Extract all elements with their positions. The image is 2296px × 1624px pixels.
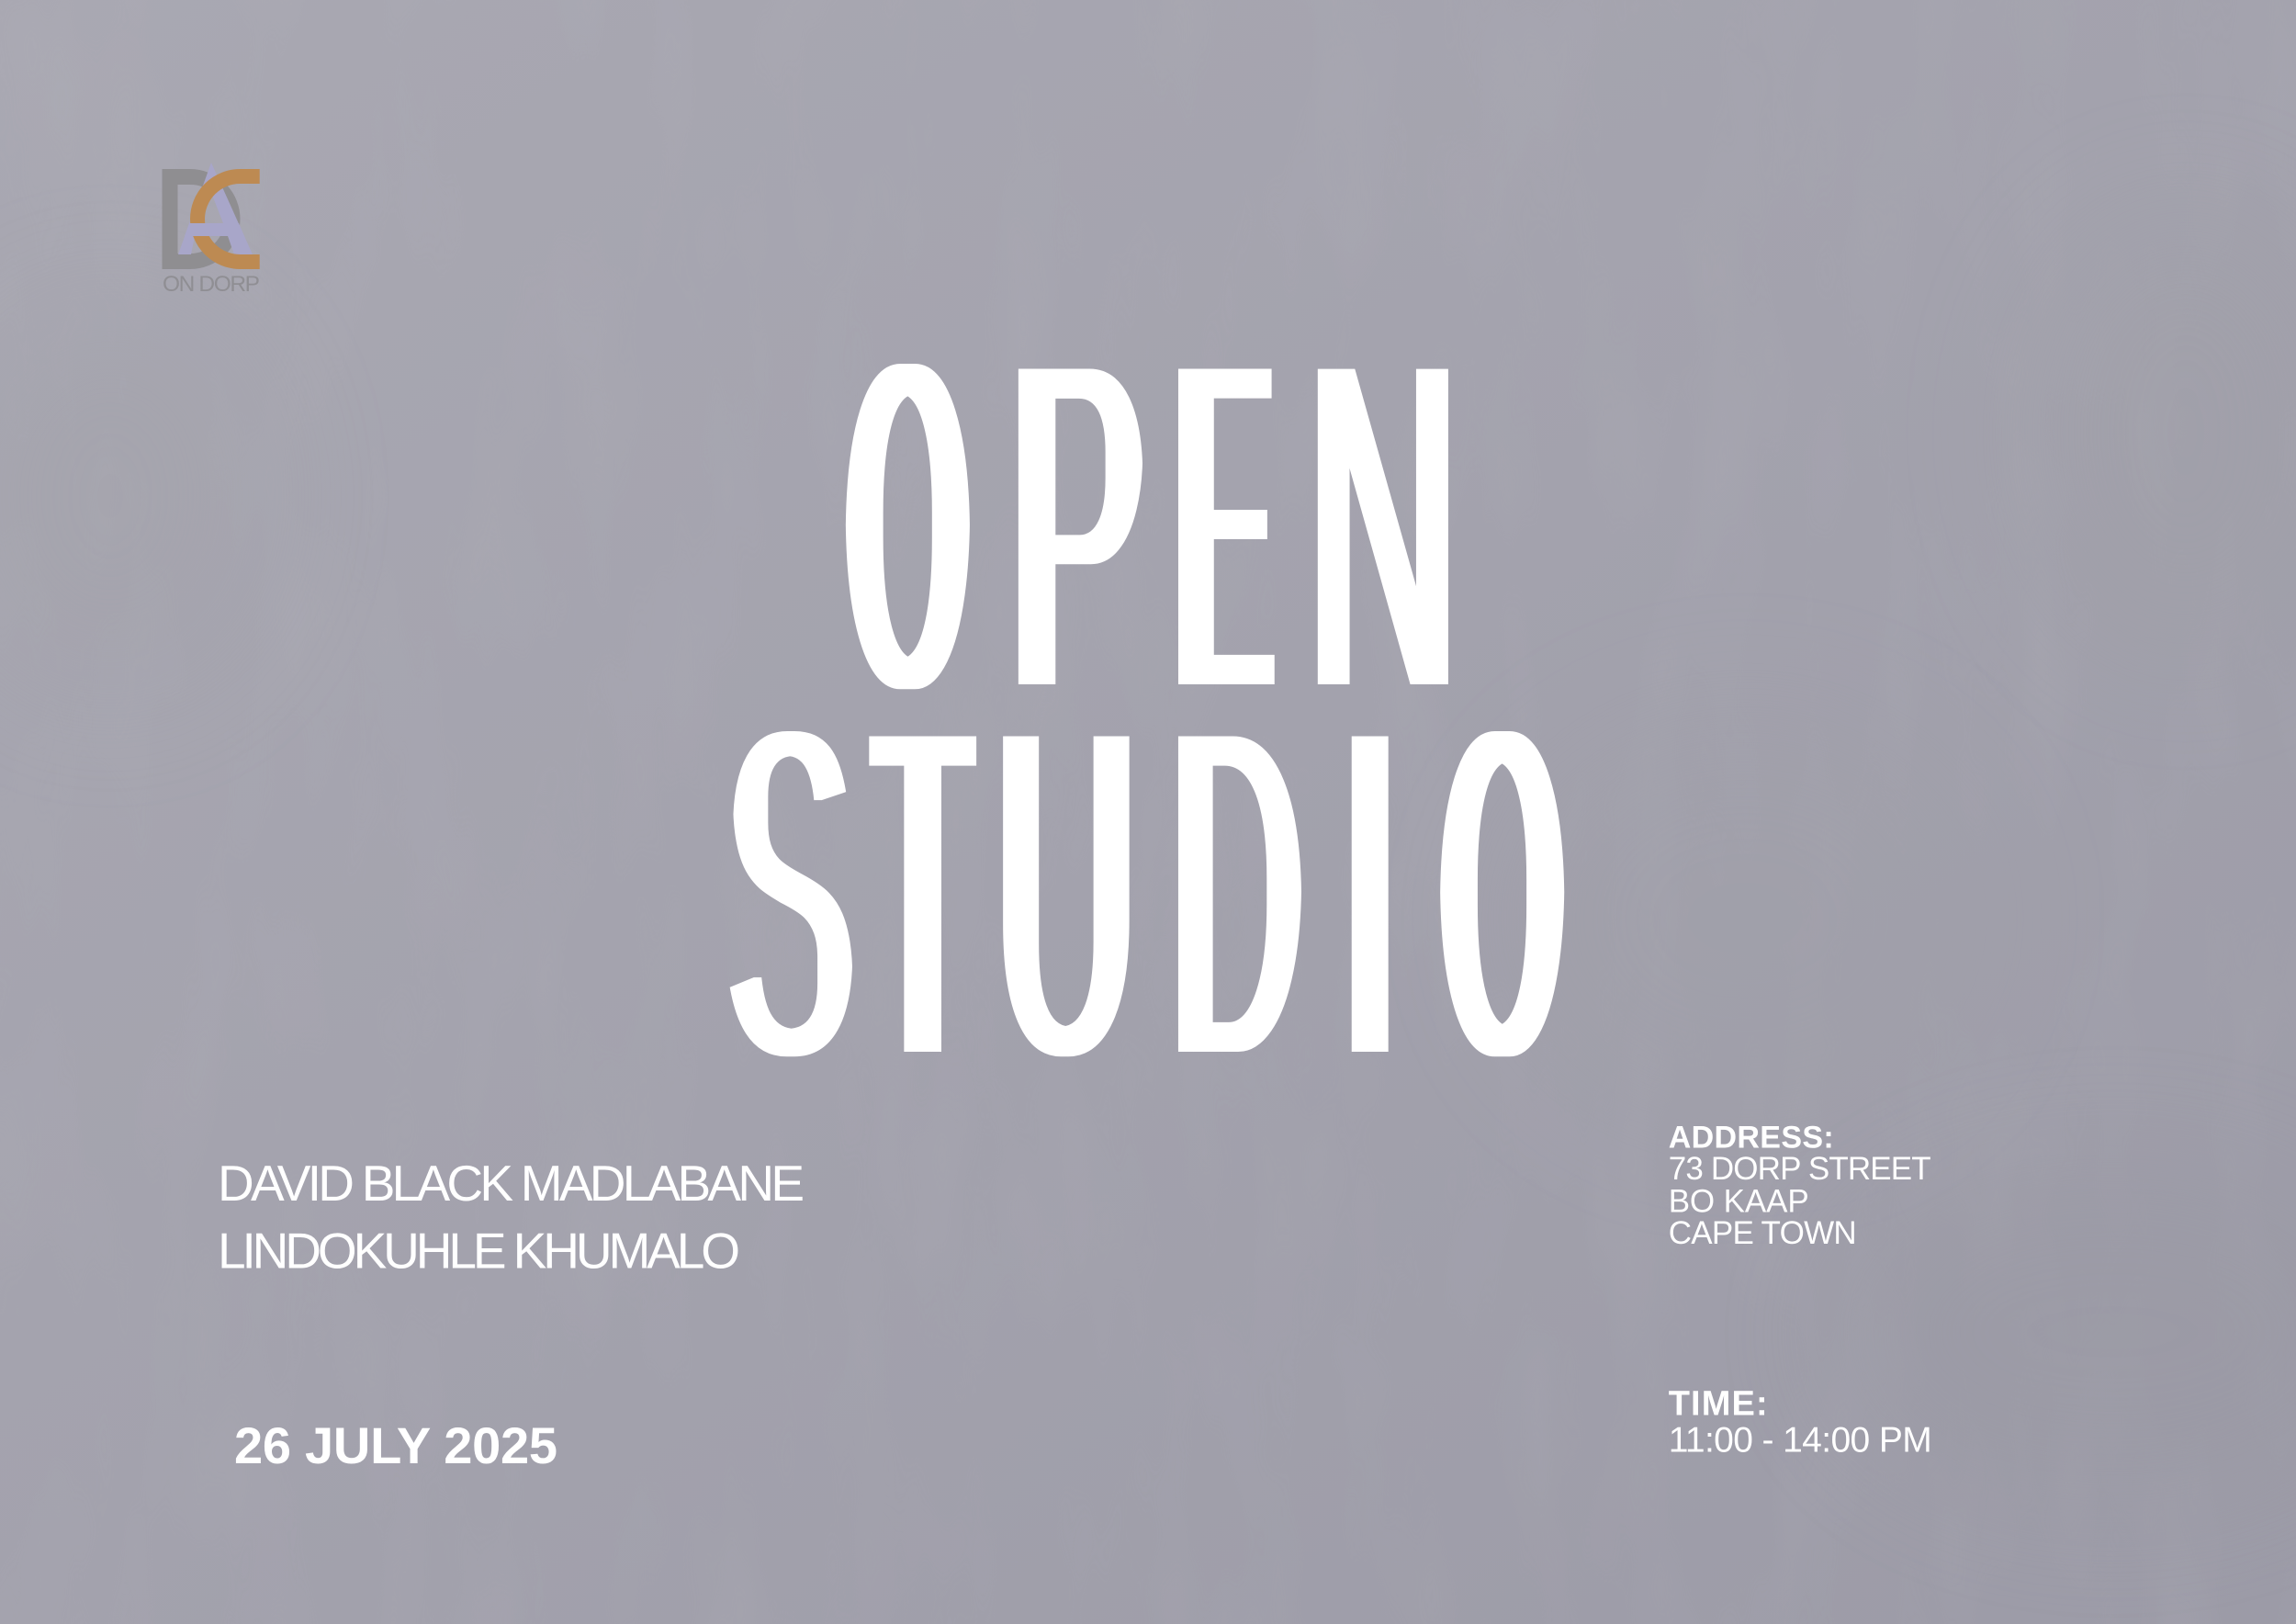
title: OPEN STUDIO: D — [1169, 615, 1306, 1170]
title: OPEN STUDIO: U — [995, 617, 1138, 1171]
logo letter D — [170, 176, 232, 261]
logo A crossbar over C — [185, 223, 244, 236]
artist names: LINDOKUHLE KHUMALO — [218, 1223, 740, 1280]
title: OPEN STUDIO — [725, 248, 1564, 1171]
time block — [1669, 1385, 1932, 1460]
artist names — [218, 1155, 805, 1280]
title: OPEN STUDIO: E — [1176, 250, 1273, 803]
address block: BO KAAP — [1669, 1183, 1809, 1219]
title: OPEN STUDIO: I — [1349, 615, 1391, 1170]
date: 26 JULY 2025 — [234, 1416, 557, 1474]
logo: DA C on Dorp — [163, 163, 260, 297]
title: OPEN STUDIO: O — [847, 248, 969, 803]
title: OPEN STUDIO: T — [874, 615, 971, 1170]
logo letter C — [197, 176, 260, 262]
title: OPEN STUDIO: P — [1008, 248, 1146, 803]
title: OPEN STUDIO: O — [1441, 615, 1564, 1170]
title: OPEN STUDIO: N — [1308, 266, 1458, 784]
artist names: DAVID BLACK MADLABANE — [218, 1155, 805, 1212]
address block: CAPE TOWN — [1669, 1215, 1857, 1251]
time block: TIME: — [1669, 1385, 1768, 1424]
logo letter A — [178, 163, 253, 254]
title: OPEN STUDIO: S — [725, 617, 857, 1171]
address block — [1669, 1120, 1931, 1251]
address block: 73 DORP STREET — [1669, 1151, 1931, 1187]
time block: 11:00 - 14:00 PM — [1669, 1421, 1932, 1460]
logo caption: ON DORP — [163, 272, 260, 297]
address block: ADDRESS: — [1669, 1120, 1834, 1155]
